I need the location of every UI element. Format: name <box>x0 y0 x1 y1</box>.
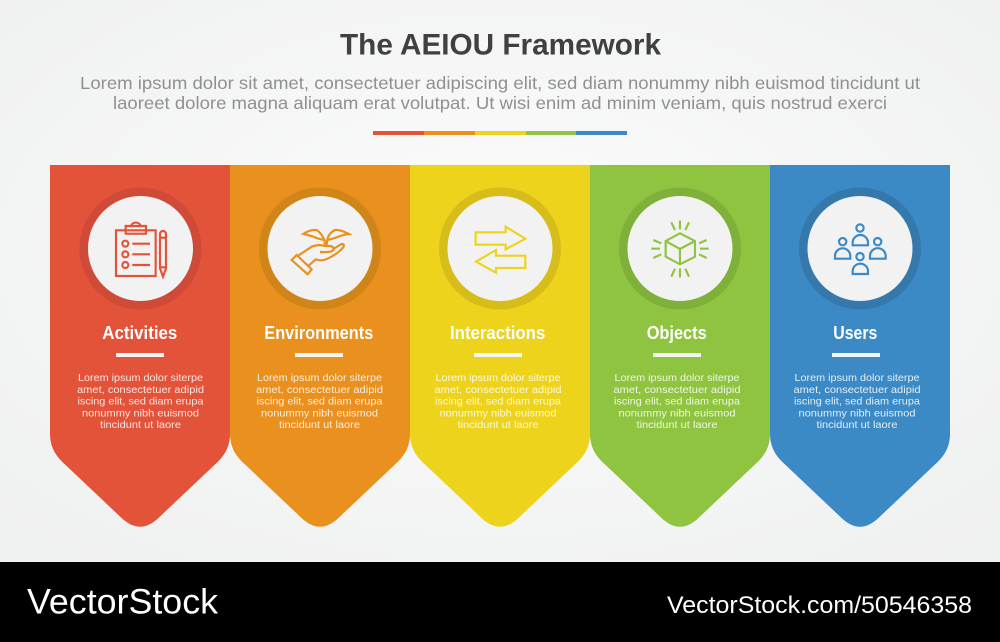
divider <box>474 353 522 357</box>
body text: nonummy nibh euismod <box>618 408 736 420</box>
icon circle <box>799 188 921 310</box>
footer bar <box>0 562 1000 642</box>
icon: opposing arrows <box>476 227 525 273</box>
icon: group of users <box>835 224 886 274</box>
body text <box>614 372 741 431</box>
icon: glowing cube <box>651 221 709 277</box>
divider <box>295 353 343 357</box>
divider <box>653 353 701 357</box>
icon: hand holding plant <box>292 230 349 274</box>
subtitle text <box>80 73 920 113</box>
arrow-shaped card <box>50 165 230 527</box>
body text: amet, consectetuer adipid <box>77 384 204 396</box>
body text: amet, consectetuer adipid <box>794 384 921 396</box>
body text <box>434 372 562 431</box>
body text: Lorem ipsum dolor siterpe <box>614 372 740 384</box>
icon circle <box>80 188 202 310</box>
divider <box>116 353 164 357</box>
arrow-shaped card <box>590 165 770 527</box>
icon circle <box>259 188 381 310</box>
label: Activities <box>102 323 177 343</box>
body text <box>794 372 921 431</box>
body text: Lorem ipsum dolor siterpe <box>78 372 203 384</box>
body text: tincidunt ut laore <box>100 419 181 431</box>
body text: amet, consectetuer adipid <box>614 384 741 396</box>
panel: Activities <box>50 165 230 527</box>
body text <box>77 372 204 431</box>
body text: Lorem ipsum dolor siterpe <box>794 372 920 384</box>
label: Users <box>833 323 877 343</box>
body text: Lorem ipsum dolor siterpe <box>257 372 382 384</box>
body text: amet, consectetuer adipid <box>256 384 383 396</box>
subtitle text: Lorem ipsum dolor sit amet, consectetuer adipiscing elit, sed diam nonummy nibh euismod tincidunt ut <box>80 73 920 93</box>
body text: tincidunt ut laore <box>816 419 898 431</box>
body text: nonummy nibh euismod <box>798 408 916 420</box>
arrow-shaped card <box>770 165 950 527</box>
label: Interactions <box>450 323 545 343</box>
body text: nonummy nibh euismod <box>440 408 557 420</box>
colour rule <box>373 131 627 135</box>
subtitle text: laoreet dolore magna aliquam erat volutpat. Ut wisi enim ad minim veniam, quis nostrud exerci <box>113 93 887 113</box>
label: Environments <box>264 323 373 343</box>
body text: iscing elit, sed diam erupa <box>256 396 383 408</box>
body text: nonummy nibh euismod <box>261 408 378 420</box>
body text: Lorem ipsum dolor siterpe <box>436 372 561 384</box>
body text: tincidunt ut laore <box>279 419 360 431</box>
icon circle <box>619 188 741 310</box>
body text: tincidunt ut laore <box>636 419 718 431</box>
body text: amet, consectetuer adipid <box>434 384 562 396</box>
body text: iscing elit, sed diam erupa <box>794 396 920 408</box>
body text: tincidunt ut laore <box>458 419 539 431</box>
footer image id: VectorStock.com/50546358 <box>667 592 972 619</box>
footer logo text: VectorStock <box>27 582 219 622</box>
body text: iscing elit, sed diam erupa <box>614 396 740 408</box>
arrow-shaped card <box>230 165 410 527</box>
icon: clipboard and pencil <box>116 223 166 277</box>
body text <box>256 372 383 431</box>
label: Objects <box>647 323 707 343</box>
arrow-shaped card <box>410 165 590 527</box>
panel: Objects <box>590 165 770 527</box>
body text: iscing elit, sed diam erupa <box>78 396 204 408</box>
divider <box>832 353 880 357</box>
icon circle <box>439 188 561 310</box>
panel: Environments <box>230 165 410 527</box>
body text: nonummy nibh euismod <box>82 408 199 420</box>
title: The AEIOU Framework <box>340 28 661 62</box>
body text: iscing elit, sed diam erupa <box>435 396 561 408</box>
panel: Users <box>770 165 950 527</box>
panel: Interactions <box>410 165 590 527</box>
